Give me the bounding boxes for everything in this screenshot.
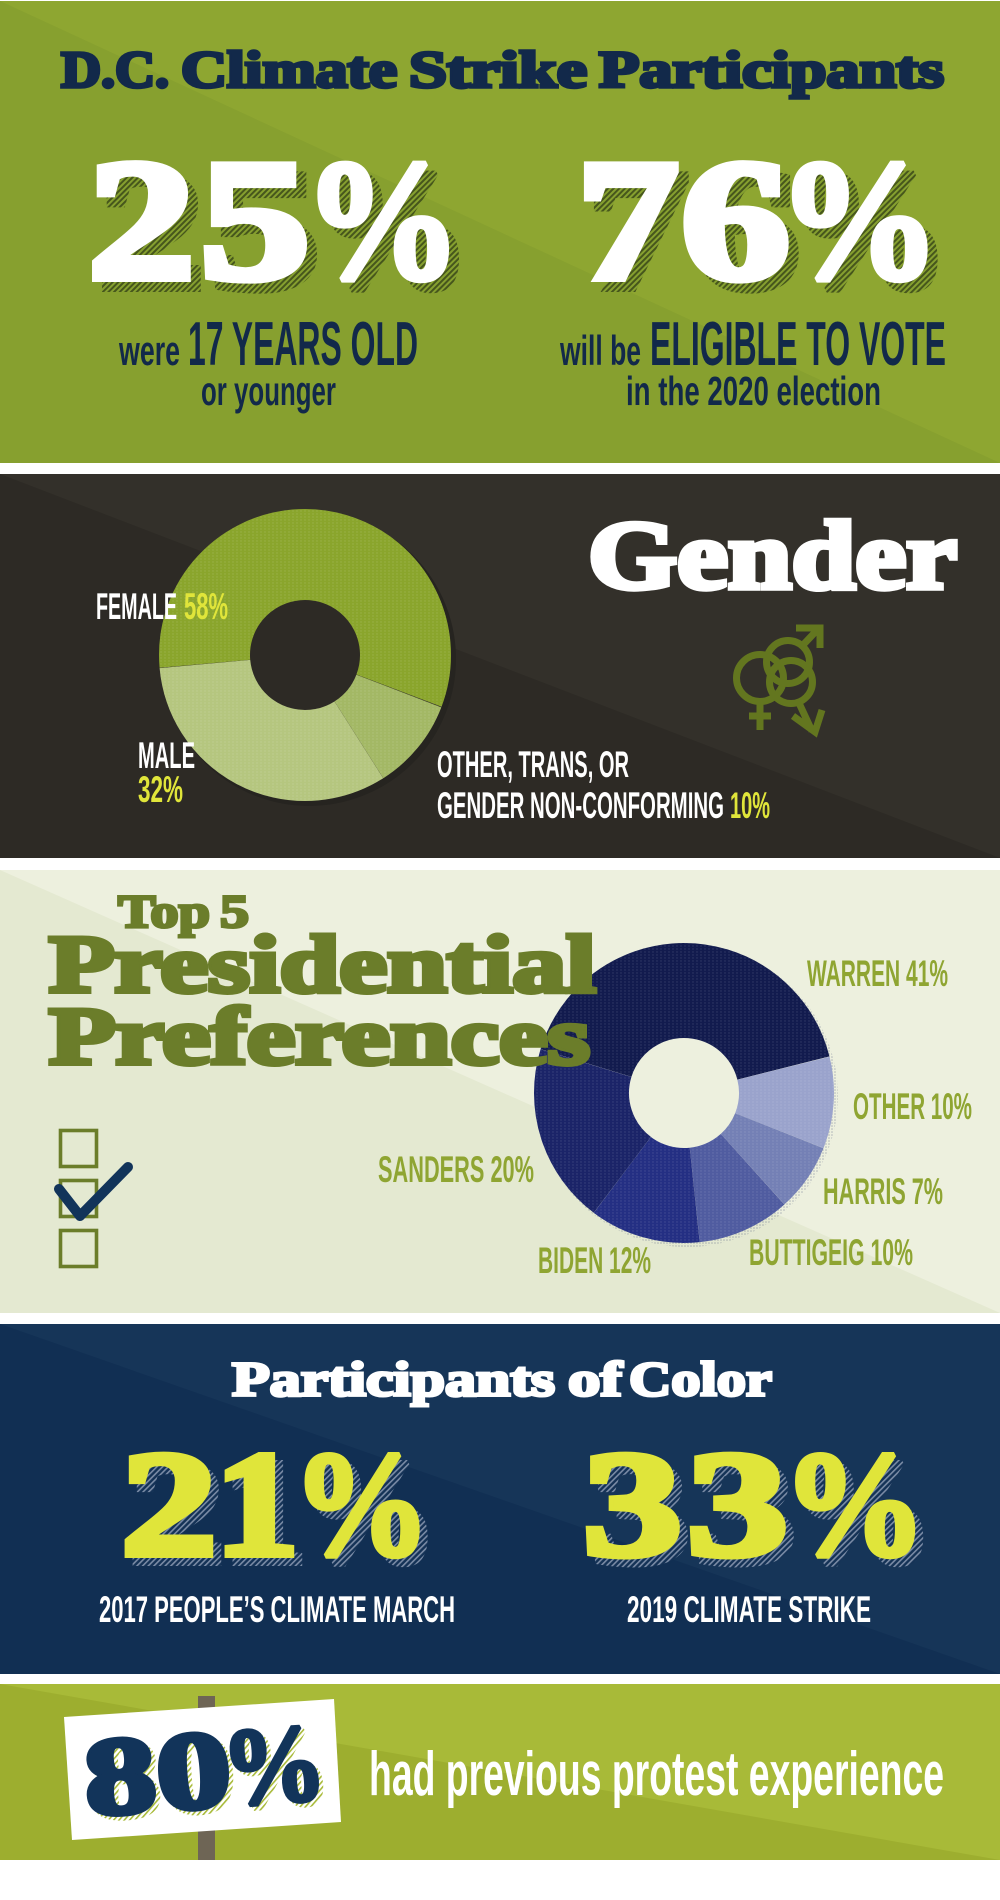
stat: 76 percent: 7	[587, 136, 689, 326]
stat: 25 percent: 5	[200, 126, 310, 316]
stat: 25 percent: 5	[210, 136, 320, 326]
stat: 21 percent: 1	[223, 1430, 307, 1596]
stat: 21 percent: 1	[215, 1422, 299, 1588]
stat: 76 percent: 7	[577, 126, 679, 316]
heading: participants of color	[232, 1352, 772, 1406]
stat: 76 percent	[577, 126, 950, 326]
icon: protest sign with 80 percent: 0	[152, 1707, 235, 1834]
label: male 32 percent	[138, 735, 195, 810]
icon: protest sign with 80 percent: 0	[157, 1711, 239, 1838]
panel: climate strike participants	[0, 1, 1000, 463]
caption: eligible to vote in the 2020 election: in the 2020 election	[626, 368, 881, 414]
stat: 33 percent: 3	[695, 1430, 796, 1596]
caption: 17 years old or younger: were	[118, 327, 180, 374]
heading: top 5 presidential preferences: Presidential	[49, 918, 596, 1010]
stat: 25 percent: %	[314, 136, 471, 326]
panel: protest experience	[0, 1684, 1000, 1860]
label: biden 12 percent: BIDEN 12%	[538, 1240, 651, 1281]
caption: 17 years old or younger: 17 YEARS OLD	[188, 310, 418, 379]
donut chart: gender	[166, 516, 452, 802]
stat: 21 percent: %	[293, 1422, 430, 1588]
stat: 33 percent: 3	[687, 1422, 788, 1588]
panel: presidential preferences	[0, 870, 1000, 1313]
stat: 33 percent	[583, 1422, 934, 1596]
stat: 33 percent: 3	[583, 1422, 682, 1588]
stat: 33 percent: %	[791, 1430, 934, 1596]
title: Strike	[409, 42, 587, 99]
heading: gender: Gender	[588, 502, 957, 610]
icon: protest sign with 80 percent	[64, 1699, 341, 1843]
icon: protest sign with 80 percent: %	[218, 1701, 329, 1829]
stat: 76 percent: %	[778, 126, 940, 316]
heading: top 5 presidential preferences	[49, 886, 596, 1082]
heading: participants of color: Color	[629, 1352, 772, 1406]
caption: eligible to vote in the 2020 election	[559, 310, 946, 414]
stat: 21 percent	[121, 1422, 438, 1596]
label: male 32 percent: MALE	[138, 735, 195, 776]
heading: top 5 presidential preferences: 5	[220, 886, 249, 938]
label: other, trans, or gender non-conforming 10 percent: OTHER, TRANS, OR	[437, 744, 629, 785]
stat: 76 percent: 6	[681, 126, 790, 316]
stat: 21 percent: 2	[121, 1422, 217, 1588]
title: Climate	[181, 42, 397, 99]
stat: 25 percent: 2	[88, 126, 195, 316]
icon: ballot checkboxes	[59, 1130, 128, 1266]
caption: 17 years old or younger	[118, 310, 418, 414]
panel: gender	[0, 474, 1000, 858]
label: other, trans, or gender non-conforming 10 percent: 10%	[730, 785, 770, 826]
label: other, trans, or gender non-conforming 10 percent	[437, 744, 770, 826]
title: Participants	[599, 42, 944, 99]
heading: top 5 presidential preferences: Top	[118, 886, 210, 938]
icon: protest sign with 80 percent: 8	[85, 1716, 164, 1843]
stat: 33 percent: 3	[591, 1430, 690, 1596]
panel: participants of color	[0, 1324, 1000, 1674]
icon: sign post	[198, 1696, 215, 1860]
title	[61, 42, 944, 99]
icon: gender symbols	[736, 627, 822, 732]
icon: protest sign with 80 percent: %	[222, 1704, 334, 1833]
donut chart: presidential preferences	[539, 948, 834, 1243]
stat: 21 percent: 2	[129, 1430, 225, 1596]
stat: 25 percent: %	[304, 126, 461, 316]
stat: 76 percent: 6	[691, 136, 800, 326]
stat: 76 percent: %	[788, 136, 950, 326]
title: D.C.	[61, 42, 169, 99]
label: other, trans, or gender non-conforming 10 percent: GENDER NON-CONFORMING	[437, 785, 724, 826]
heading: participants of color: Participants	[232, 1352, 555, 1406]
stat: 21 percent: %	[301, 1430, 438, 1596]
caption: 2017 people's climate march: 2017 PEOPLE’S CLIMATE MARCH	[99, 1589, 455, 1630]
stat: 33 percent: %	[783, 1422, 926, 1588]
stat: 25 percent: 2	[98, 136, 205, 326]
heading: top 5 presidential preferences: Preferences	[49, 990, 590, 1082]
label: female 58 percent: FEMALE	[96, 586, 177, 627]
caption: 17 years old or younger: or younger	[201, 368, 336, 414]
label: male 32 percent: 32%	[138, 769, 183, 810]
stat: 25 percent	[88, 126, 471, 326]
label: female 58 percent: 58%	[184, 586, 228, 627]
heading: participants of color: of	[568, 1352, 623, 1406]
icon: protest sign with 80 percent: 8	[80, 1712, 160, 1839]
caption: eligible to vote in the 2020 election: will be	[559, 327, 641, 374]
label: sanders 20 percent: SANDERS 20%	[378, 1149, 534, 1190]
